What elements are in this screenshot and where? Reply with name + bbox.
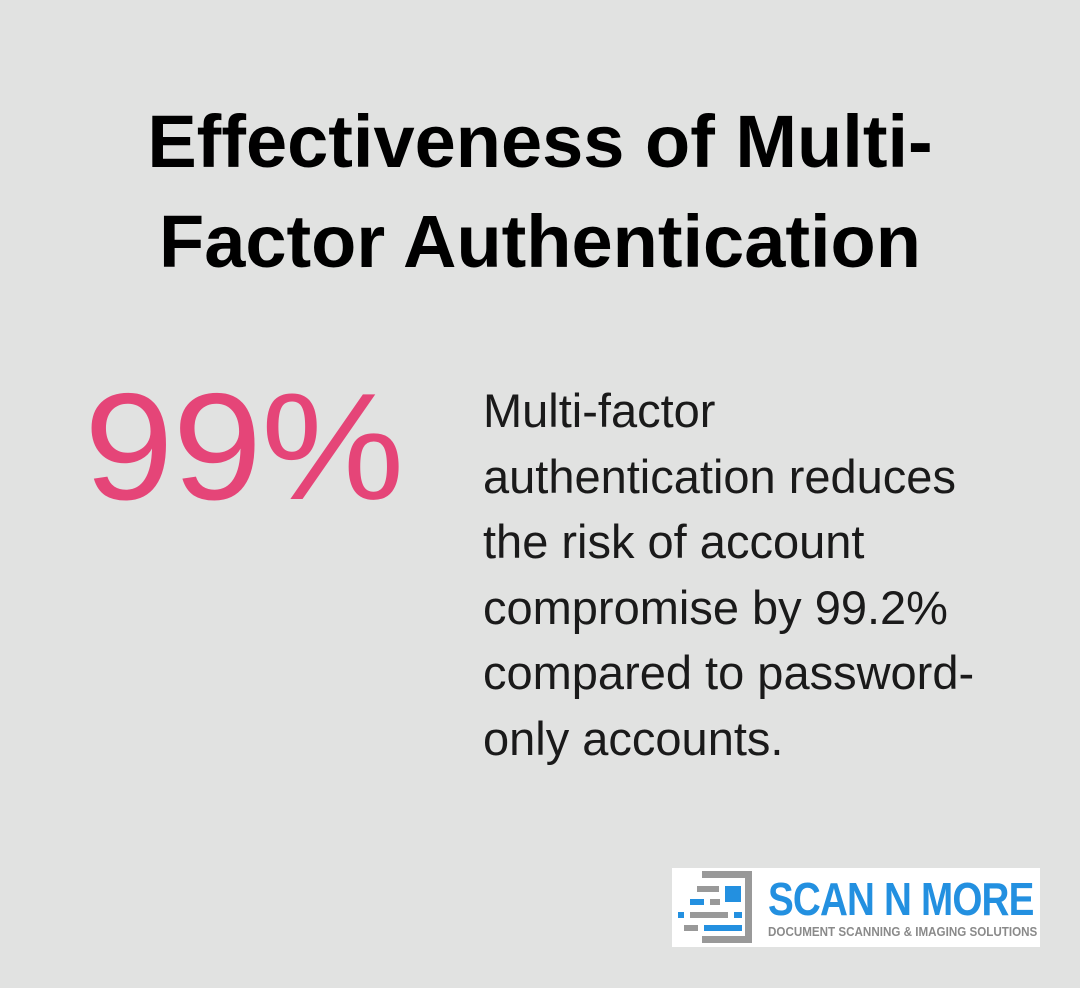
title: Factor Authentication (159, 200, 921, 283)
logo text: SCAN N MORE (768, 873, 1034, 925)
logo (672, 868, 1040, 947)
logo tagline: DOCUMENT SCANNING & IMAGING SOLUTIONS (768, 925, 1037, 939)
description text: only accounts. (483, 712, 783, 764)
icon: scan (678, 871, 752, 943)
description text: authentication reduces (483, 450, 956, 502)
description text: compared to password- (483, 646, 974, 699)
big stat: 99% (84, 362, 403, 532)
title (147, 100, 933, 283)
description text: compromise by 99.2% (483, 580, 948, 634)
description text (483, 384, 974, 765)
title: Effectiveness of Multi- (147, 100, 933, 183)
description text: the risk of account (483, 515, 864, 568)
description text: Multi-factor (483, 384, 715, 437)
